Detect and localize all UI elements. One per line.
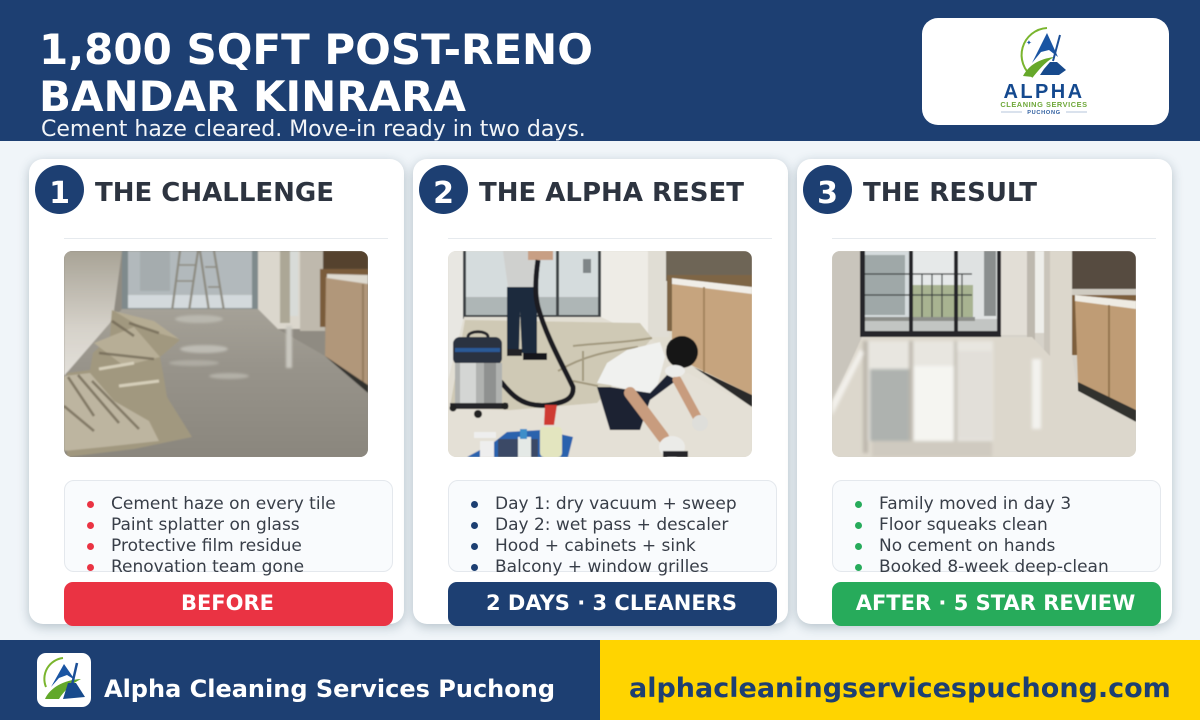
bullet: paint splatter: Paint splatter on glass <box>111 515 300 535</box>
icon: alpha broom logo: ✦ <box>1026 39 1032 47</box>
title: BANDAR KINRARA <box>39 72 466 121</box>
badge: after 5 star review: AFTER · 5 STAR REVIEW <box>856 591 1135 615</box>
badge: before: BEFORE <box>181 591 274 615</box>
bullet: day 1: Day 1: dry vacuum + sweep <box>495 494 737 514</box>
icon: alpha broom logo: CLEANING SERVICES <box>1000 100 1088 109</box>
step number 1: 1 <box>49 176 70 211</box>
title: 1,800 SQFT POST-RENO <box>39 25 593 74</box>
icon: alpha broom logo <box>1000 27 1088 116</box>
heading: the result: THE RESULT <box>863 178 1037 208</box>
website url: alphacleaningservicespuchong.com <box>629 673 1171 704</box>
bullet: hood cabinets sink: Hood + cabinets + sink <box>495 536 696 556</box>
header band <box>0 0 1200 141</box>
icon: alpha broom logo: ALPHA <box>1004 81 1084 103</box>
list: outcomes <box>832 480 1161 572</box>
footer right: website <box>600 640 1200 720</box>
panel: the alpha reset <box>413 159 788 624</box>
footer left: brand <box>0 640 600 720</box>
step number 2: 2 <box>433 176 454 211</box>
photo: cleaners at work <box>448 251 752 457</box>
bullet: team gone: Renovation team gone <box>111 557 304 577</box>
list: problems <box>64 480 393 572</box>
list: cleaning steps <box>448 480 777 572</box>
badge: before <box>64 582 393 626</box>
brand name: Alpha Cleaning Services Puchong <box>104 675 555 703</box>
photo: after, polished floor <box>832 251 1136 457</box>
step number 1 <box>35 165 84 214</box>
icon: footer logo <box>37 653 91 707</box>
heading: the alpha reset: THE ALPHA RESET <box>479 178 744 208</box>
bullet: balcony: Balcony + window grilles <box>495 557 709 577</box>
badge: after 5 star review <box>832 582 1161 626</box>
bullet: day 2: Day 2: wet pass + descaler <box>495 515 728 535</box>
panel: the result <box>797 159 1172 624</box>
bullet: film residue: Protective film residue <box>111 536 302 556</box>
step number 2 <box>419 165 468 214</box>
subtitle: Cement haze cleared. Move-in ready in two days. <box>41 117 586 142</box>
badge: 2 days 3 cleaners <box>448 582 777 626</box>
step number 3 <box>803 165 852 214</box>
bullet: floor squeaks: Floor squeaks clean <box>879 515 1048 535</box>
step number 3: 3 <box>817 176 838 211</box>
panel: the challenge <box>29 159 404 624</box>
icon: alpha broom logo: PUCHONG <box>1027 110 1061 116</box>
bullet: cement haze: Cement haze on every tile <box>111 494 336 514</box>
bullet: booked deep-clean: Booked 8-week deep-clean <box>879 557 1109 577</box>
photo: before, cement hazed floor <box>64 251 368 457</box>
bullet: no cement: No cement on hands <box>879 536 1055 556</box>
bullet: family moved: Family moved in day 3 <box>879 494 1071 514</box>
logo card <box>922 18 1169 125</box>
badge: 2 days 3 cleaners: 2 DAYS · 3 CLEANERS <box>486 591 737 615</box>
heading: the challenge: THE CHALLENGE <box>95 178 334 208</box>
title <box>39 25 593 121</box>
